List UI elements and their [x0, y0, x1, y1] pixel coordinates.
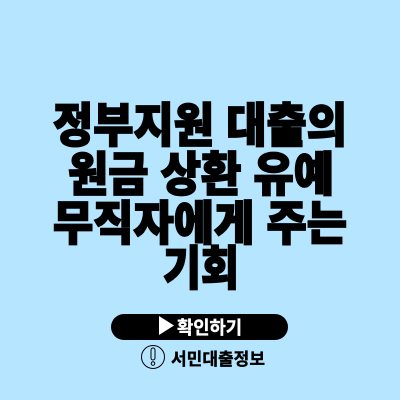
brand label: 서민대출정보 — [171, 350, 265, 369]
title: 원금 상환 유예 — [68, 148, 334, 201]
button: 확인하기 — [111, 314, 288, 340]
title: 기회 — [163, 242, 239, 295]
icon: exclamation in circle — [142, 346, 164, 368]
title: 정부지원 대출의 — [53, 99, 347, 152]
title — [53, 99, 347, 295]
title: 무직자에게 주는 — [53, 197, 347, 250]
button: 확인하기: 확인하기 — [177, 318, 242, 338]
